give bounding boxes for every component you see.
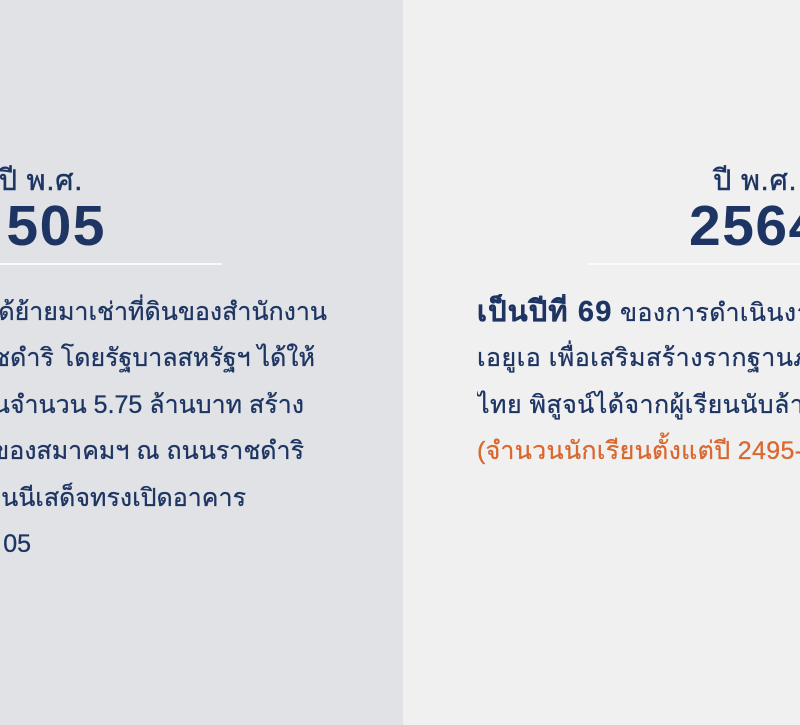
text block: 2505 history: นนีเสด็จทรงเปิดอาคาร	[1, 484, 246, 512]
text block: 2505 history	[0, 294, 327, 558]
panel: 2564	[403, 0, 800, 725]
text block: 2505 history: ของสมาคมฯ ณ ถนนราชดำริ	[0, 437, 304, 465]
text block: 2564 history	[477, 294, 800, 465]
year 2505: 505	[6, 194, 106, 258]
heading: year label: ปี พ.ศ.	[0, 165, 83, 197]
text block: 2505 history: ชดำริ โดยรัฐบาลสหรัฐฯ ได้ให้	[0, 344, 315, 372]
heading: year label: ปี พ.ศ.	[713, 165, 797, 197]
text block: 2505 history: 05	[3, 530, 31, 558]
divider line	[0, 263, 222, 265]
panel: 2505	[0, 0, 403, 725]
divider line	[587, 263, 800, 265]
text block: 2505 history: นจำนวน 5.75 ล้านบาท สร้าง	[0, 391, 304, 419]
